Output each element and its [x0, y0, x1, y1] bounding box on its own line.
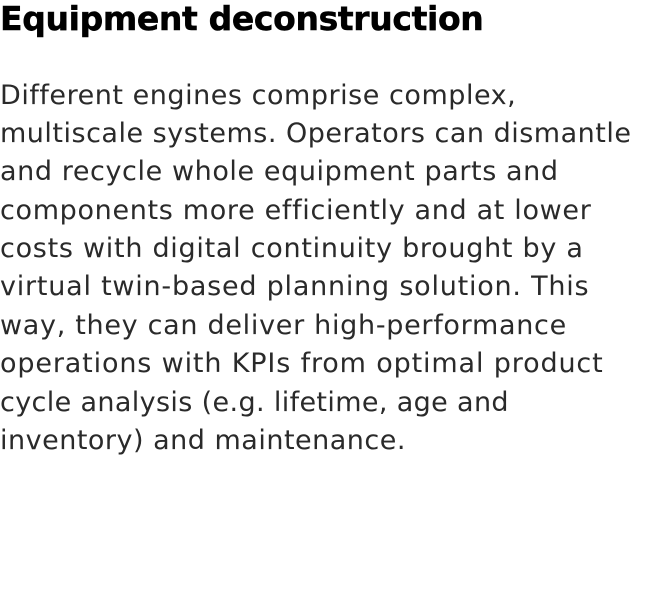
text block: body paragraph: multiscale systems. Operators can dismantle: [0, 118, 631, 149]
text block: body paragraph: inventory) and maintenance.: [0, 425, 406, 456]
text block: body paragraph: operations with KPIs from optimal product: [0, 348, 604, 379]
text block: body paragraph: way, they can deliver high-performance: [0, 310, 567, 341]
text block: body paragraph: costs with digital continuity brought by a: [0, 233, 584, 264]
text block: body paragraph: and recycle whole equipment parts and: [0, 156, 559, 187]
text block: body paragraph: cycle analysis (e.g. lifetime, age and: [0, 387, 509, 418]
title: Equipment deconstruction: [0, 0, 483, 38]
text block: body paragraph: components more efficiently and at lower: [0, 195, 591, 226]
text block: body paragraph: [0, 80, 631, 456]
text block: body paragraph: Different engines comprise complex,: [0, 80, 516, 110]
text block: body paragraph: virtual twin-based planning solution. This: [0, 271, 589, 302]
